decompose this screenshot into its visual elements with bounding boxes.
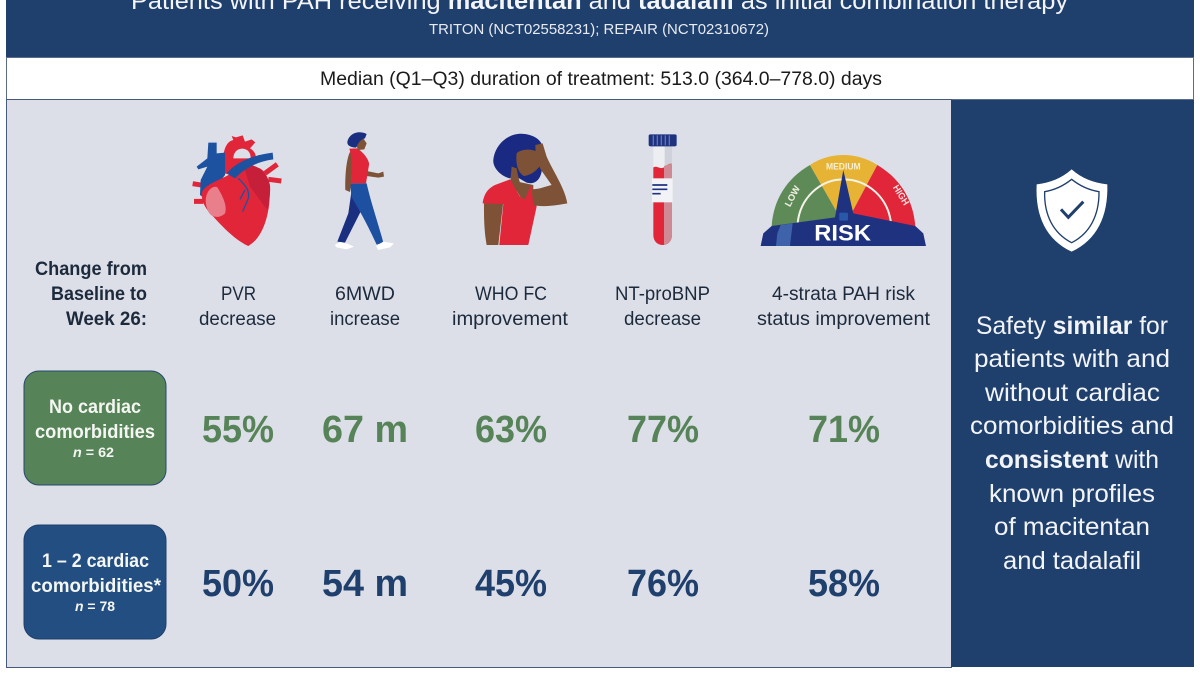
safety statement: of macitentan: [994, 513, 1150, 541]
icon: risk gauge: [761, 155, 926, 246]
group box: no cardiac comorbidities: [24, 371, 166, 485]
icon: woman with headache: [483, 134, 567, 245]
row heading: change from baseline: Baseline to: [51, 284, 147, 305]
safety statement: consistent with: [985, 446, 1159, 474]
panel: results: [6, 100, 952, 668]
values: no cardiac comorbidities: 71%: [808, 409, 880, 451]
icon: shield: [1037, 169, 1107, 252]
values: no cardiac comorbidities: [202, 409, 880, 451]
safety statement: known profiles: [989, 480, 1155, 508]
row heading: change from baseline: Week 26:: [66, 309, 147, 330]
safety statement: comorbidities and: [970, 412, 1174, 440]
column labels: 6MWD: [335, 284, 395, 305]
values: no cardiac comorbidities: 63%: [475, 409, 547, 451]
icon: risk gauge: RISK: [814, 221, 871, 246]
icon: risk gauge: LOW: [783, 184, 802, 208]
values: no cardiac comorbidities: 77%: [627, 409, 699, 451]
column labels: [199, 284, 931, 330]
panel: safety: [951, 100, 1194, 667]
safety statement: without cardiac: [984, 379, 1160, 407]
safety statement: Safety similar for: [976, 312, 1168, 340]
header banner: [6, 0, 1194, 57]
trial identifiers: TRITON (NCT02558231); REPAIR (NCT02310672): [429, 21, 769, 38]
column labels: PVR: [221, 284, 256, 305]
column labels: 4-strata PAH risk: [772, 284, 915, 305]
row heading: change from baseline: [35, 259, 147, 330]
safety statement: [970, 312, 1174, 575]
group box: 1-2 cardiac comorbidities: n = 78: [75, 598, 115, 614]
column labels: improvement: [452, 309, 569, 330]
icon: risk gauge: HIGH: [891, 183, 911, 207]
icon: risk gauge: MEDIUM: [826, 161, 861, 171]
safety statement: patients with and: [974, 345, 1170, 373]
group box: 1-2 cardiac comorbidities: [24, 525, 166, 639]
group box: no cardiac comorbidities: n = 62: [73, 444, 114, 460]
values: 1-2 cardiac comorbidities: 45%: [475, 563, 547, 605]
values: 1-2 cardiac comorbidities: [202, 563, 880, 605]
values: 1-2 cardiac comorbidities: 50%: [202, 563, 274, 605]
treatment duration band: [6, 58, 1194, 100]
row heading: change from baseline: Change from: [35, 259, 147, 280]
group box: no cardiac comorbidities: No cardiac: [49, 397, 141, 418]
treatment duration band: Median (Q1–Q3) duration of treatment: 513.0 (364.0–778.0) days: [320, 69, 882, 90]
values: 1-2 cardiac comorbidities: 76%: [627, 563, 699, 605]
group box: 1-2 cardiac comorbidities: 1 – 2 cardiac: [42, 551, 149, 572]
values: 1-2 cardiac comorbidities: 54 m: [322, 563, 408, 605]
group box: 1-2 cardiac comorbidities: comorbidities*: [31, 576, 162, 597]
column labels: decrease: [199, 309, 276, 330]
column labels: NT-proBNP: [615, 284, 710, 305]
icon: blood test tube: [649, 134, 677, 245]
icon: walking woman: [335, 132, 394, 250]
values: 1-2 cardiac comorbidities: 58%: [808, 563, 880, 605]
values: no cardiac comorbidities: 67 m: [322, 409, 408, 451]
values: no cardiac comorbidities: 55%: [202, 409, 274, 451]
column labels: increase: [330, 309, 400, 330]
safety statement: and tadalafil: [1003, 547, 1141, 575]
group box: no cardiac comorbidities: comorbidities: [35, 422, 155, 443]
icon: heart: [193, 135, 281, 246]
column labels: decrease: [624, 309, 701, 330]
column labels: status improvement: [757, 309, 931, 330]
column labels: WHO FC: [475, 284, 547, 305]
